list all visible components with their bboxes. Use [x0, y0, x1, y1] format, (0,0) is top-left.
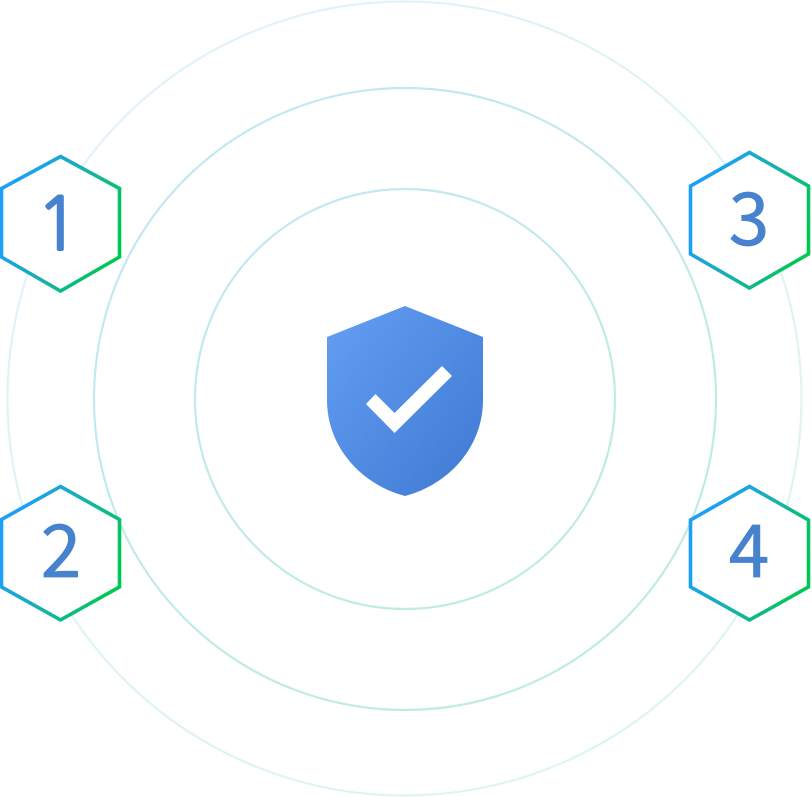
icon: shield with check mark	[327, 306, 483, 496]
hexagon badge 1	[2, 156, 120, 291]
hexagon badge 2	[2, 486, 120, 620]
middle ring	[94, 88, 716, 710]
hexagon badge 4	[690, 486, 808, 620]
hexagon badge 3: 3	[729, 161, 769, 267]
inner ring	[195, 189, 615, 609]
hexagon badge 4: 4	[729, 493, 769, 599]
hexagon badge 1: 1	[36, 188, 80, 261]
hexagon badge 3	[690, 152, 808, 288]
hexagon badge 2: 2	[41, 493, 81, 599]
